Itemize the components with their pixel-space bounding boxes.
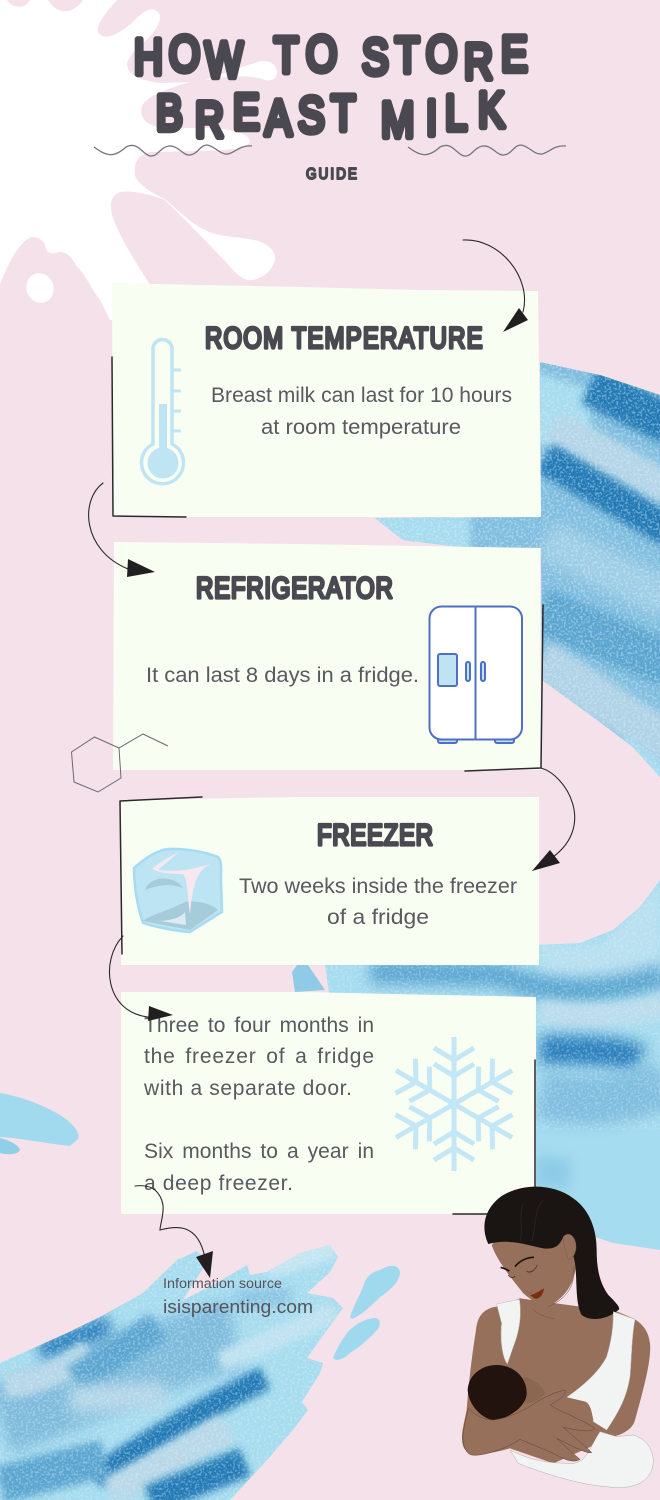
heading: refrigerator: REFRIGERATOR [196, 570, 393, 605]
blue brush fragment between cards [292, 965, 325, 992]
icon: snowflake [386, 1037, 522, 1171]
text: freezer durations: with a separate door. [143, 1077, 352, 1100]
source label: isisparenting.com [163, 1297, 313, 1317]
title [134, 26, 528, 148]
text: room temperature: Breast milk can last for 10 hours [211, 384, 512, 407]
icon: molecule [72, 734, 168, 792]
illustration: mother breastfeeding [462, 1187, 653, 1488]
arrow: to refrigerator [89, 483, 155, 577]
text: room temperature [211, 384, 512, 439]
source label [163, 1276, 313, 1317]
wavy divider right [408, 145, 566, 156]
text: freezer: Two weeks inside the freezer [239, 875, 517, 898]
title: BREAST MILK [156, 82, 505, 148]
blue brush stroke: left [0, 1093, 78, 1154]
panel: freezer [120, 797, 539, 965]
arrow: to long-term freezer [109, 936, 173, 1021]
text: refrigerator: It can last 8 days in a fridge. [146, 664, 419, 687]
source label: Information source [163, 1276, 282, 1291]
blue brush stroke: upper right [370, 360, 660, 780]
text: freezer: of a fridge [327, 906, 429, 929]
icon: fridge [430, 606, 522, 743]
heading: room temperature: ROOM TEMPERATURE [205, 320, 483, 355]
heading: freezer: FREEZER [317, 817, 433, 852]
icon: thermometer [142, 340, 184, 484]
wavy divider left [94, 145, 252, 156]
panel: refrigerator [113, 542, 543, 771]
title: HOW TO STORE [134, 26, 528, 90]
icon: ice cube [134, 849, 222, 932]
blue brush stroke: lower right [320, 880, 660, 1260]
text: freezer durations: a deep freezer. [144, 1172, 293, 1195]
panel: long-term freezer [121, 992, 536, 1214]
milk splash [0, 0, 277, 320]
subtitle: GUIDE [306, 166, 357, 183]
text: freezer [239, 875, 517, 929]
text: freezer durations: Six months to a year in [144, 1140, 374, 1163]
arrow: to freezer [532, 768, 575, 871]
text: freezer durations: the freezer of a fridge [144, 1045, 374, 1068]
text: freezer durations: Three to four months in [144, 1014, 374, 1037]
text: room temperature: at room temperature [261, 416, 461, 439]
small blue splash [333, 1266, 400, 1360]
blue brush stroke: bottom left [0, 1240, 350, 1500]
arrow: to information source [135, 1186, 213, 1278]
panel: room temperature [112, 283, 541, 517]
arrow: to room temperature [463, 240, 528, 332]
text: freezer durations [143, 1014, 374, 1195]
